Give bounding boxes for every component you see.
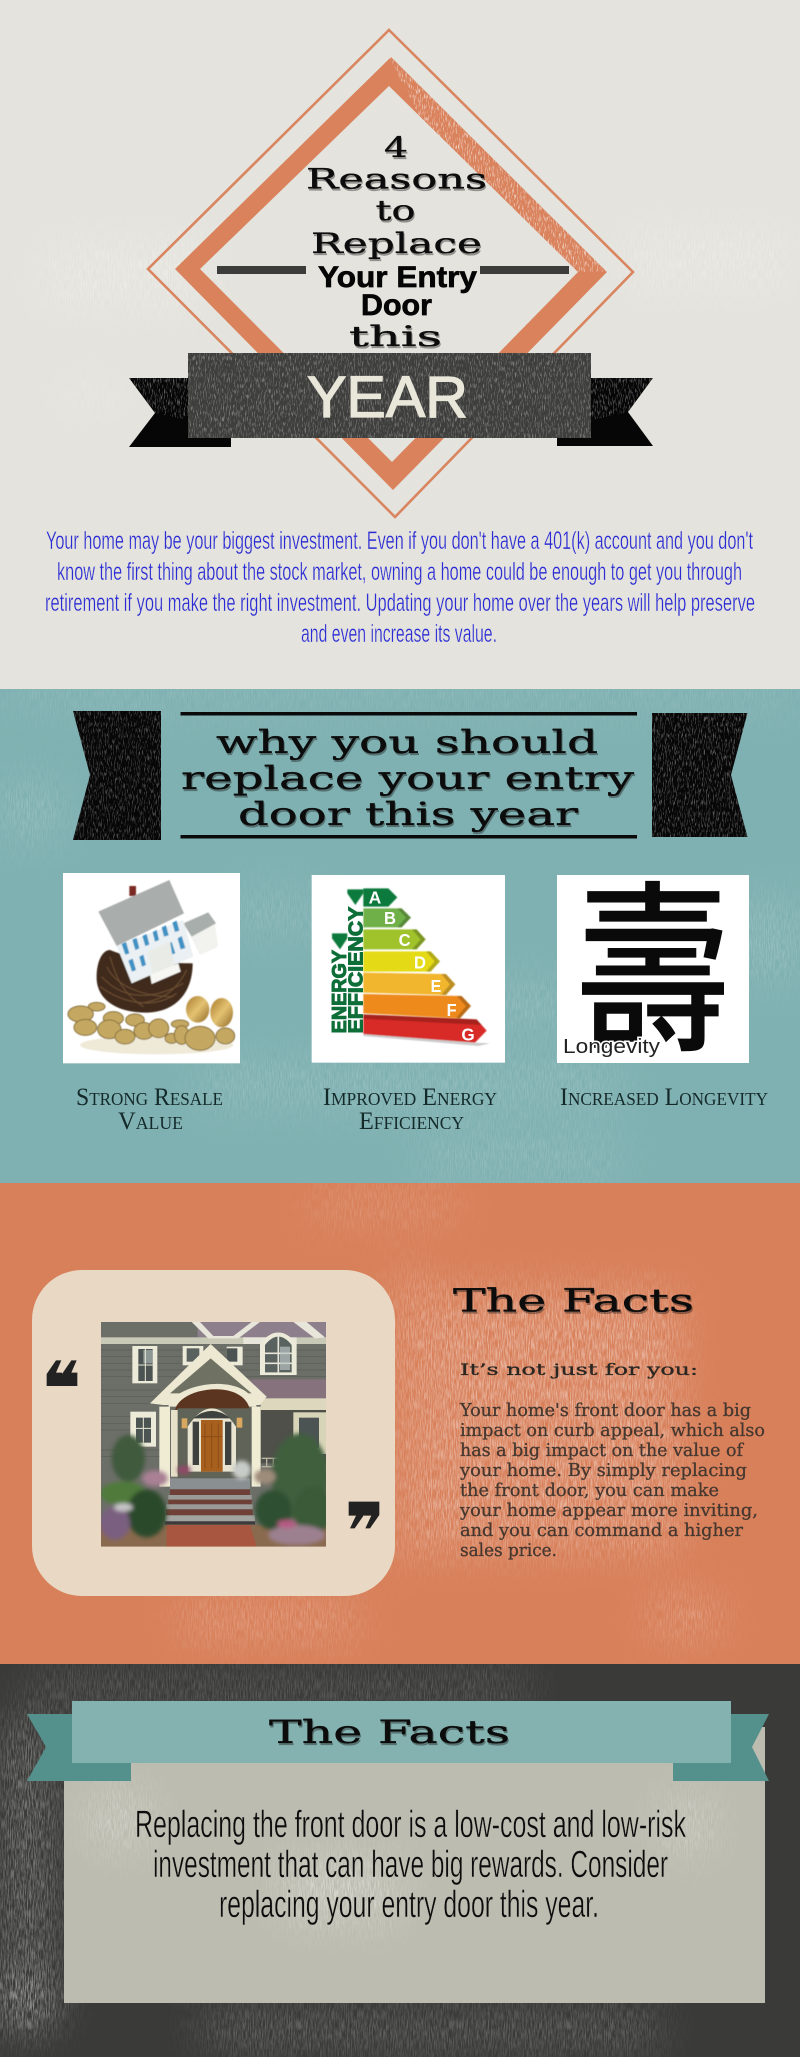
icon: closing quote xyxy=(349,1502,379,1528)
year ribbon: YEAR xyxy=(307,365,468,430)
section background: orange xyxy=(0,1183,800,1664)
image: energy efficiency chart: ENERGY xyxy=(328,950,351,1033)
facts paragraph: and you can command a higher xyxy=(460,1520,743,1541)
heading text: replace your entry xyxy=(181,759,634,797)
facts paragraph xyxy=(459,1400,765,1561)
title: Your Entry xyxy=(318,261,477,294)
closing paragraph: replacing your entry door this year. xyxy=(219,1884,599,1926)
heading: the facts (orange section): The Facts xyxy=(453,1284,694,1320)
image: longevity character: 壽 xyxy=(576,823,730,1089)
image: energy efficiency chart: EFFICIENCY xyxy=(345,906,368,1033)
heading text: why you should xyxy=(216,723,598,761)
title: this xyxy=(349,320,442,353)
subheading: It’s not just for you: xyxy=(460,1360,698,1379)
image: longevity character: Longevity xyxy=(563,1036,660,1058)
label: strong resale value xyxy=(76,1084,223,1135)
title: Door xyxy=(361,289,432,322)
section background: header paper xyxy=(69,252,751,290)
image: energy efficiency chart: D xyxy=(414,953,426,973)
image: energy efficiency chart: C xyxy=(399,930,411,950)
image: energy efficiency chart: F xyxy=(447,1000,457,1020)
image: energy efficiency chart: A xyxy=(369,887,381,907)
image: energy efficiency chart: B xyxy=(384,908,396,928)
image: energy efficiency chart xyxy=(312,875,505,1063)
facts paragraph: your home appear more inviting, xyxy=(459,1500,758,1521)
image: energy efficiency chart: G xyxy=(461,1025,475,1045)
image: house in nest with coins xyxy=(63,873,240,1063)
facts paragraph: the front door, you can make xyxy=(460,1480,719,1501)
facts paragraph: your home. By simply replacing xyxy=(459,1460,747,1481)
title: Reasons xyxy=(306,162,487,196)
title: to xyxy=(376,194,416,227)
icon: opening quote xyxy=(47,1360,77,1386)
left black ribbon xyxy=(73,711,161,840)
intro paragraph xyxy=(45,527,755,648)
facts paragraph: sales price. xyxy=(460,1540,557,1561)
facts paragraph: has a big impact on the value of xyxy=(460,1440,744,1461)
ribbon banner xyxy=(27,1701,769,1781)
title: Replace xyxy=(311,227,482,260)
label: strong resale value: Value xyxy=(118,1108,183,1135)
label: improved energy efficiency: Improved Energy xyxy=(323,1084,497,1111)
label: strong resale value: Strong Resale xyxy=(76,1084,223,1111)
closing paragraph xyxy=(135,1804,687,1926)
heading text: door this year xyxy=(238,795,579,833)
year ribbon xyxy=(129,353,653,447)
facts paragraph: impact on curb appeal, which also xyxy=(460,1420,765,1441)
title: 4 xyxy=(384,131,408,164)
section heading: why replace xyxy=(73,711,748,840)
diamond frame xyxy=(148,30,633,517)
label: increased longevity: Increased Longevity xyxy=(560,1084,768,1111)
panel: photo card xyxy=(32,1270,395,1596)
section background: teal xyxy=(0,680,800,1183)
label: improved energy efficiency: Efficiency xyxy=(359,1108,464,1135)
heading text xyxy=(181,723,634,833)
panel: closing card xyxy=(64,1727,765,2003)
facts paragraph: Your home's front door has a big xyxy=(459,1400,751,1421)
photo: house front door xyxy=(100,1322,333,1547)
ribbon banner: The Facts xyxy=(269,1715,510,1751)
section background: dark xyxy=(0,1664,800,2057)
label: improved energy efficiency xyxy=(323,1084,497,1135)
intro paragraph: and even increase its value. xyxy=(301,620,497,648)
image: energy efficiency chart: E xyxy=(431,976,441,996)
divider bars beside title xyxy=(217,266,569,274)
right black ribbon xyxy=(652,713,748,837)
title xyxy=(306,131,487,353)
